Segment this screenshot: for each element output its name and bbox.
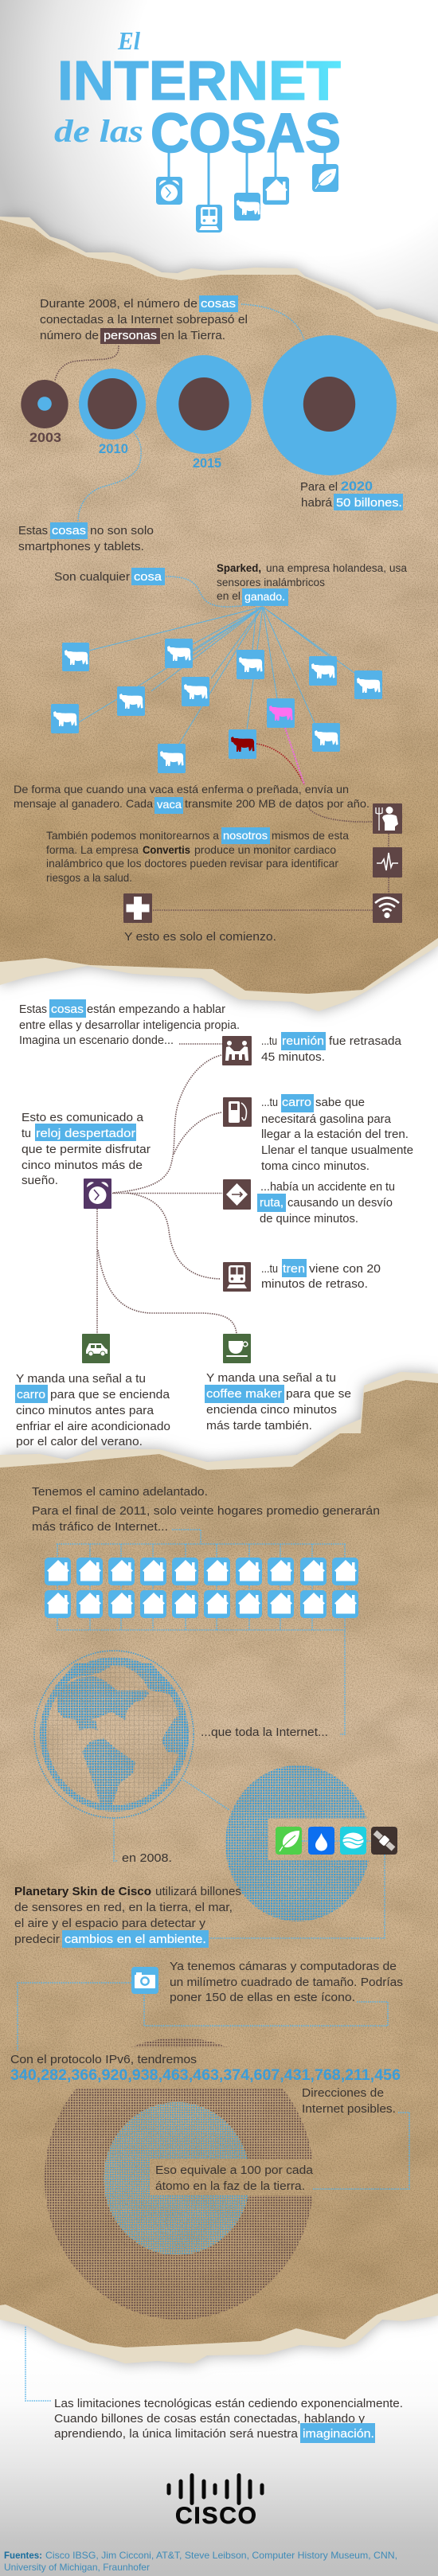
icon: leaf: [312, 164, 338, 192]
intro text: conectadas a la Internet sobrepasó el: [40, 313, 248, 326]
text: closing: [54, 2397, 403, 2443]
text: tren: viene con 20: [309, 1262, 381, 1276]
text: nosotros: [46, 827, 349, 884]
intro text: en la Tierra.: [161, 329, 225, 342]
text: reunion: [261, 1032, 402, 1064]
dotted connector and label: en 2008: en 2008.: [122, 1851, 172, 1865]
house icons: two rows of ten: [45, 1558, 358, 1618]
text: carro: enfriar el aire acondicionado: [16, 1420, 170, 1433]
dotted connector: direcciones to eso: [313, 2113, 409, 2189]
icon: wifi: [373, 893, 402, 923]
icon: house: [263, 177, 289, 205]
text: carro gasolina: carro: [282, 1096, 311, 1109]
text: tenemos el camino: Tenemos el camino adelantado.: [32, 1485, 208, 1499]
network: sensor lines: [79, 607, 354, 744]
text: de forma que: De forma que cuando una vaca está enferma o preñada, envía un: [14, 784, 349, 795]
dotted connector: to closing: [25, 2327, 51, 2401]
text: ipv6: Internet posibles.: [302, 2102, 396, 2116]
intro text: [40, 295, 248, 344]
cow 4: [309, 656, 337, 686]
text: son cualquier cosa: cosa: [134, 570, 162, 584]
text: closing: Cuando billones de cosas están conectadas, hablando y: [54, 2412, 366, 2426]
text: accidente ruta: de quince minutos.: [260, 1212, 358, 1225]
house row 1: [45, 1558, 358, 1585]
text: planetary skin: [14, 1885, 241, 1948]
icon: cow: [234, 193, 260, 221]
icon: air cloud: [340, 1827, 366, 1855]
text: de forma que: mensaje al ganadero. Cada: [14, 798, 153, 810]
icon: meeting: [222, 1036, 252, 1065]
text: estas cosas estan empezando: Imagina un escenario donde...: [19, 1034, 174, 1047]
sources: Cisco IBSG, Jim Cicconi, AT&T, Steve Leibson, Computer History Museum, CNN,: [45, 2550, 397, 2561]
text: planetary skin: de sensores en red, en la tierra, el mar,: [14, 1901, 233, 1914]
cow 5: [354, 670, 382, 699]
intro text: personas: [104, 329, 157, 342]
intro text: número de: [40, 329, 99, 342]
text: planetary skin: utilizará billones: [155, 1885, 241, 1898]
title: INTERNET: [57, 49, 341, 111]
text: carro: Y manda una señal a tu: [16, 1372, 146, 1386]
text: camaras: [170, 1960, 403, 2004]
text: ipv6: 340,282,366,920,938,463,463,374,607,431,768,211,456: [10, 2067, 401, 2084]
text: reunion: fue retrasada: [329, 1034, 402, 1048]
text: y esto es solo el comienzo: Y esto es solo el comienzo.: [124, 930, 276, 944]
cow 10: [312, 723, 340, 752]
text: coffee maker: [205, 1371, 351, 1433]
text: carro: carro: [17, 1388, 45, 1401]
icon: medical cross: [123, 893, 152, 923]
cow 12: [158, 744, 186, 773]
text: estas cosas: Estas: [18, 524, 48, 537]
cow 2: [165, 639, 193, 668]
text: ipv6: Direcciones de: [302, 2086, 384, 2100]
text: planetary skin: Planetary Skin de Cisco: [14, 1885, 151, 1898]
text: reloj despertador: sueño.: [22, 1174, 58, 1187]
halftone circle: ipv6 addresses brown: [45, 2038, 314, 2320]
text: eso equivale: [155, 2164, 314, 2193]
cow 9: pink pregnant: [267, 698, 295, 728]
text: sparked: en el: [217, 590, 241, 602]
halftone circle: ipv6 inner blue: [104, 2102, 250, 2255]
text: estas cosas: no son solo: [90, 524, 154, 537]
halftone circle: planetary skin: [225, 1765, 371, 1921]
sources: Fuentes:: [4, 2550, 42, 2561]
background: top grey vignette: [0, 0, 438, 334]
cow 8: [51, 704, 79, 733]
circle 2020: [263, 335, 397, 475]
text: carro: por el calor del verano.: [16, 1435, 143, 1448]
callout: 2020: [300, 479, 403, 510]
text: nosotros: nosotros: [223, 829, 268, 842]
text: de forma que: [14, 784, 370, 814]
text: reloj despertador: que te permite disfrutar: [22, 1143, 151, 1156]
icon: farmer: [373, 803, 402, 834]
circle 2003: [21, 380, 68, 445]
dotted connector: globe to skin circle: [183, 1780, 229, 1810]
title: [54, 26, 341, 164]
sources: University of Michigan, Fraunhofer: [4, 2562, 150, 2573]
text: closing: aprendiendo, la única limitación será nuestra: [54, 2427, 299, 2441]
text: estas cosas estan empezando: cosas: [51, 1003, 84, 1016]
icon: satellite: [371, 1827, 397, 1855]
title hanging icons: [156, 151, 338, 233]
icon: coffee cup: [223, 1334, 251, 1363]
text: nosotros: Convertis: [143, 844, 190, 856]
torn paper: first sheet edge: [0, 217, 438, 1011]
text: carro gasolina: toma cinco minutos.: [261, 1159, 370, 1173]
text: accidente ruta: [257, 1180, 395, 1225]
text: tren: minutos de retraso.: [261, 1277, 368, 1291]
intro text: cosas: [201, 297, 236, 311]
text: reloj despertador: reloj despertador: [36, 1127, 135, 1140]
text: estas cosas estan empezando: entre ellas y desarrollar inteligencia propia.: [19, 1018, 240, 1032]
cow 1: [62, 643, 89, 671]
chart: things vs people circles: [21, 335, 397, 475]
icon: alarm clock: [156, 177, 182, 205]
text: estas cosas estan empezando: están empezando a hablar: [87, 1003, 225, 1016]
text: coffee maker: coffee maker: [206, 1387, 282, 1401]
text: nosotros: inalámbrico que los doctores pueden revisar para identificar: [46, 858, 338, 870]
text: reunion: ...tu: [261, 1034, 277, 1048]
cisco logo: CISCO: [175, 2503, 256, 2529]
text: sparked: ganado.: [244, 590, 285, 603]
text: carro gasolina: necesitará gasolina para: [261, 1112, 392, 1126]
text: accidente ruta: causando un desvío: [287, 1196, 393, 1210]
text: reloj despertador: [22, 1111, 151, 1187]
text: nosotros: forma. La empresa: [46, 844, 139, 856]
icon: water drop: [308, 1827, 334, 1855]
globe: [34, 1651, 194, 1818]
icon: car: [82, 1334, 110, 1363]
text: tenemos el camino: [32, 1485, 380, 1534]
text: coffee maker: para que se: [286, 1387, 351, 1401]
text: nosotros: También podemos monitorearnos a: [46, 830, 219, 842]
text: camaras: Ya tenemos cámaras y computadoras de: [170, 1960, 397, 1973]
text: nosotros: mismos de esta: [272, 830, 349, 842]
text: estas cosas: smartphones y tablets.: [18, 540, 144, 553]
text: carro gasolina: [261, 1094, 413, 1173]
text: carro: cinco minutos antes para: [16, 1404, 154, 1417]
icon: camera: [131, 1967, 158, 1994]
callout: 2020: 50 billones.: [336, 496, 402, 510]
text: de forma que: transmite 200 MB de datos por año.: [185, 798, 370, 810]
text: eso equivale: átomo en la faz de la tierra.: [155, 2179, 305, 2193]
circle 2010: 2010: [99, 441, 128, 456]
text: carro: para que se encienda: [50, 1388, 170, 1401]
cow 3: [237, 650, 264, 679]
text: planetary skin: predecir: [14, 1933, 60, 1946]
text: coffee maker: Y manda una señal a tu: [206, 1371, 336, 1385]
dotted alerts from cows: [153, 728, 389, 910]
cow 7: [182, 677, 209, 706]
text: reunion: reunión: [282, 1034, 324, 1048]
text: estas cosas estan empezando: [19, 999, 240, 1047]
text: tren: [261, 1259, 381, 1291]
text: sparked: sensores inalámbricos: [217, 577, 325, 588]
text: de forma que: vaca: [157, 798, 182, 811]
torn paper: second sheet edge: [0, 1372, 438, 2363]
text: estas cosas estan empezando: Estas: [19, 1003, 47, 1016]
title: El: [117, 26, 140, 55]
text: accidente ruta: ...había un accidente en tu: [260, 1180, 395, 1194]
text: accidente ruta: ruta,: [260, 1196, 284, 1210]
text: ipv6: [10, 2053, 401, 2116]
text: sparked: Sparked,: [217, 562, 261, 574]
title: de las: [54, 113, 143, 149]
text: estas cosas: cosas: [52, 524, 86, 537]
house row 2: [45, 1590, 358, 1618]
text: son cualquier cosa: Son cualquier: [54, 570, 130, 584]
text: carro gasolina: sabe que: [315, 1096, 365, 1109]
dotted tree: homes: [57, 1530, 346, 1734]
text: coffee maker: más tarde también.: [206, 1419, 312, 1433]
text: carro gasolina: ...tu: [261, 1096, 278, 1109]
text: reloj despertador: tu: [22, 1127, 31, 1140]
text: sparked: una empresa holandesa, usa: [266, 562, 407, 574]
icon: route sign: [223, 1179, 251, 1210]
text: reunion: 45 minutos.: [261, 1050, 325, 1064]
cow 11: red sick: [229, 729, 256, 759]
dotted connectors: camera: [18, 1983, 388, 2050]
text: tenemos el camino: más tráfico de Internet...: [32, 1520, 168, 1534]
text: closing: imaginación.: [303, 2427, 374, 2441]
text: planetary skin: cambios en el ambiente.: [65, 1933, 206, 1946]
text: son cualquier cosa: [54, 568, 242, 607]
sources: [4, 2550, 397, 2573]
icon: train: [196, 205, 222, 233]
text: closing: Las limitaciones tecnológicas están cediendo exponencialmente.: [54, 2397, 403, 2410]
label: que toda la internet: ...que toda la Internet...: [201, 1726, 328, 1739]
text: camaras: un milímetro cuadrado de tamaño. Podrías: [170, 1976, 403, 1989]
dotted connectors: sensors: [209, 1841, 385, 1938]
callout: 2020: 2020: [341, 479, 373, 494]
circle 2003: 2003: [29, 430, 61, 445]
text: nosotros: produce un monitor cardiaco: [194, 844, 336, 856]
text: coffee maker: encienda cinco minutos: [206, 1403, 337, 1417]
circle 2015: 2015: [193, 455, 221, 471]
text: carro: [15, 1372, 170, 1448]
cow icons: [51, 639, 382, 773]
dotted connector and label: en 2008: [114, 1818, 172, 1865]
text: tren: tren: [283, 1262, 305, 1276]
callout: 2020: Para el: [300, 480, 338, 494]
text: nosotros: riesgos a la salud.: [46, 872, 132, 884]
callout: 2020: habrá: [301, 496, 333, 510]
text: tren: ...tu: [261, 1262, 278, 1276]
cisco logo: [169, 2475, 262, 2529]
text: reloj despertador: Esto es comunicado a: [22, 1111, 144, 1124]
dotted connectors: scenario tree: [97, 1044, 237, 1334]
dotted connectors: intro to circles: [55, 304, 304, 522]
icon: train brown: [223, 1262, 251, 1292]
icon: leaf sensor: [276, 1827, 302, 1855]
title: COSAS: [151, 102, 341, 164]
circle 2010: [79, 369, 146, 456]
text: eso equivale: Eso equivale a 100 por cada: [155, 2164, 314, 2177]
text: carro gasolina: llegar a la estación del tren.: [261, 1128, 409, 1141]
text: reloj despertador: cinco minutos más de: [22, 1159, 143, 1172]
icon: gas pump: [223, 1097, 252, 1127]
circle 2015: [156, 355, 252, 471]
text: sparked: [217, 562, 407, 606]
text: camaras: poner 150 de ellas en este ícono.: [170, 1991, 355, 2004]
text: estas cosas: [18, 522, 154, 553]
icon: alarm clock purple: [84, 1179, 111, 1209]
background: bottom grey gradient: [0, 2357, 438, 2576]
text: ipv6: Con el protocolo IPv6, tendremos: [10, 2053, 197, 2066]
icon: heart monitor: [373, 847, 402, 878]
cow 6: [117, 686, 145, 716]
text: carro gasolina: Llenar el tanque usualmente: [261, 1143, 413, 1157]
text: tenemos el camino: Para el final de 2011, solo veinte hogares promedio generarán: [32, 1504, 380, 1518]
intro text: Durante 2008, el número de: [40, 297, 197, 311]
text: planetary skin: el aire y el espacio para detectar y: [14, 1917, 206, 1930]
